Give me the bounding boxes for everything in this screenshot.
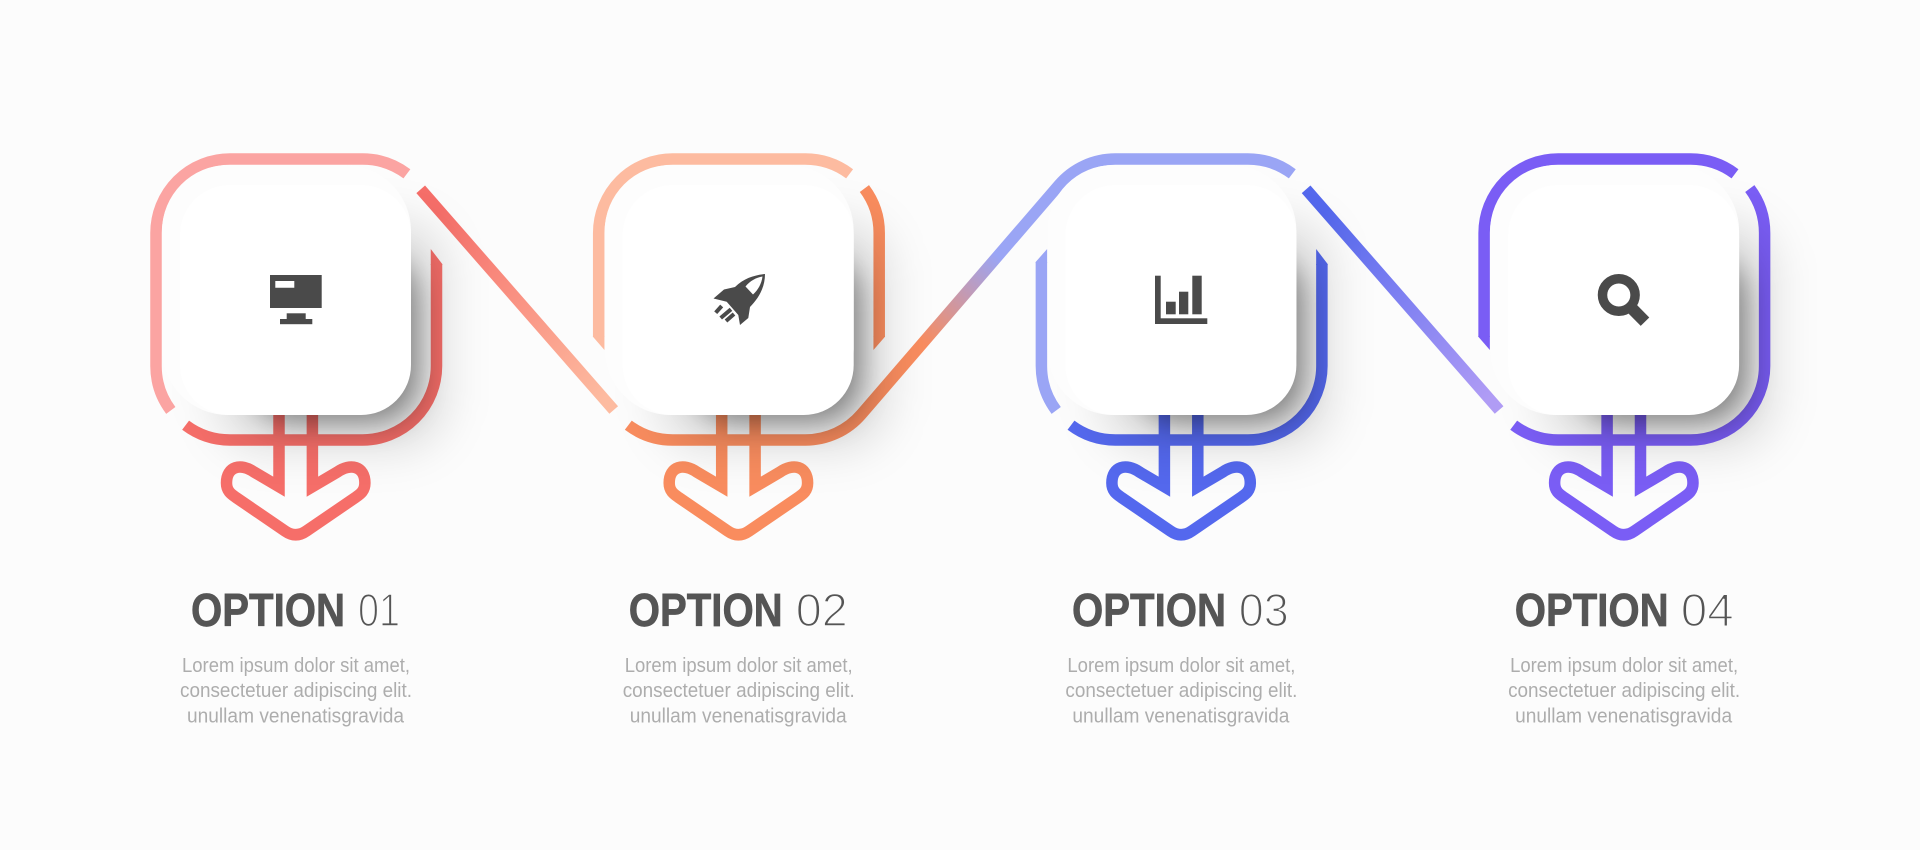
description: unullam venenatisgravida	[630, 706, 848, 728]
card	[623, 185, 854, 415]
description: consectetuer adipiscing elit.	[180, 680, 412, 702]
card shadow	[1047, 165, 1331, 450]
ring: segment right and bottom	[1514, 189, 1765, 440]
description: Lorem ipsum dolor sit amet,	[1067, 655, 1295, 677]
number: 01	[358, 584, 400, 636]
icon: magnifying glass	[1602, 279, 1645, 322]
ring: light segment top and left	[593, 159, 850, 350]
panel: option 01	[156, 159, 614, 728]
ring: dark segment right	[864, 189, 885, 350]
description	[1508, 655, 1740, 728]
arrow: down	[1555, 410, 1693, 535]
card shadow	[162, 165, 446, 450]
description: unullam venenatisgravida	[1515, 706, 1733, 728]
ring: light segment left	[1036, 249, 1056, 410]
heading: OPTION	[191, 584, 345, 636]
card shadow	[605, 165, 889, 450]
ring: dark segment bottom and right	[186, 249, 442, 440]
ring: light segment top and left	[156, 159, 407, 410]
description: consectetuer adipiscing elit.	[623, 680, 855, 702]
arrow: down	[1112, 410, 1250, 535]
connector line to option 02	[421, 189, 614, 410]
description: Lorem ipsum dolor sit amet,	[1510, 655, 1738, 677]
description: unullam venenatisgravida	[187, 706, 405, 728]
arrow: down	[669, 410, 808, 535]
heading: OPTION	[1515, 584, 1669, 636]
icon: monitor	[270, 275, 322, 324]
description: consectetuer adipiscing elit.	[1508, 680, 1740, 702]
number: 02	[796, 584, 848, 636]
heading: OPTION	[629, 584, 783, 636]
card	[1508, 185, 1739, 415]
description	[1065, 655, 1297, 728]
description: Lorem ipsum dolor sit amet,	[182, 655, 410, 677]
panel: option 03	[1036, 165, 1499, 728]
description: Lorem ipsum dolor sit amet,	[625, 655, 853, 677]
panel: option 02	[593, 159, 1292, 728]
ring: segment top and left	[1478, 159, 1735, 350]
arrow: down	[226, 410, 365, 535]
number: 03	[1239, 584, 1289, 636]
panel: option 04	[1478, 159, 1774, 728]
number: 04	[1681, 584, 1734, 636]
ring: dark segment bottom and right	[1071, 249, 1328, 440]
icon: rocket	[714, 274, 765, 325]
description: unullam venenatisgravida	[1072, 706, 1290, 728]
card	[180, 185, 411, 415]
connector line to option 04	[1306, 189, 1499, 410]
heading: OPTION	[1072, 584, 1226, 636]
description	[623, 655, 855, 728]
connector line to option 03	[628, 159, 1292, 440]
description	[180, 655, 412, 728]
description: consectetuer adipiscing elit.	[1065, 680, 1297, 702]
card	[1065, 185, 1296, 415]
icon: bar chart	[1155, 276, 1207, 324]
card shadow	[1490, 165, 1774, 450]
